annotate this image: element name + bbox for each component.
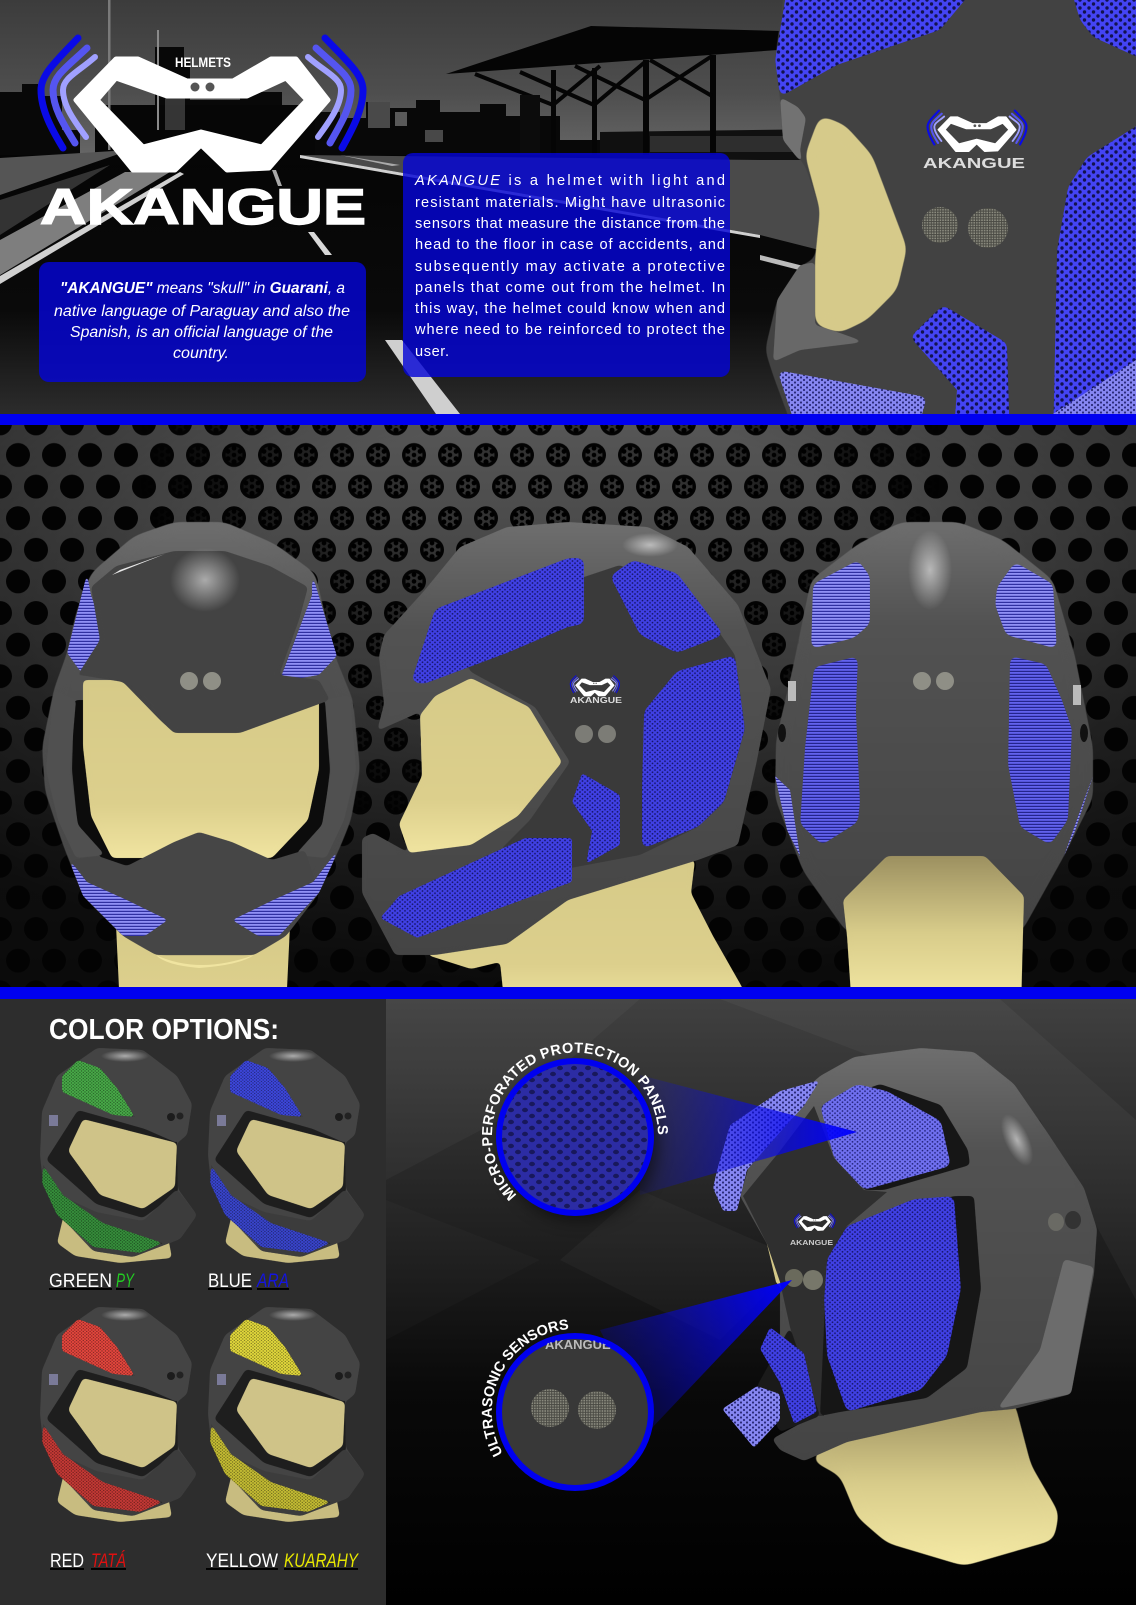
divider bar one	[0, 414, 1136, 425]
top banner with city road photo	[0, 0, 1136, 414]
circular label: MICRO-PERFORATED PROTECTION PANELS	[482, 1042, 668, 1202]
mesh panel: lower	[910, 305, 1010, 440]
label: red	[50, 1549, 126, 1572]
label: red: RED	[50, 1550, 84, 1572]
sensor: second	[803, 1270, 823, 1290]
face slit	[767, 1244, 782, 1290]
mesh: upper right	[279, 573, 337, 682]
mesh: top rear	[610, 560, 724, 653]
mesh: chin inner	[760, 1327, 817, 1424]
front view helmet	[42, 522, 360, 1010]
road	[0, 155, 1136, 414]
meaning callout: native language of Paraguay and also the	[54, 303, 350, 320]
description callout: AKANGUE is a helmet with light and	[414, 173, 725, 189]
mesh: lower left	[63, 845, 168, 936]
mesh: middle left	[800, 656, 860, 845]
helmet: yellow	[208, 1307, 365, 1522]
sensor: right	[203, 672, 221, 690]
helmet logo	[923, 111, 1026, 172]
logo mark	[41, 38, 363, 170]
city skyline	[0, 47, 600, 155]
visor highlight	[170, 548, 240, 612]
shell	[740, 1048, 1097, 1461]
helmet logo	[790, 1214, 835, 1247]
lower rear lighter panel	[997, 1259, 1094, 1409]
sensor: right	[968, 208, 1008, 248]
label: yellow: KUARAHY	[284, 1550, 360, 1572]
mesh: brow	[713, 1080, 820, 1211]
sensor: right	[936, 672, 954, 690]
road dashes	[308, 232, 332, 255]
meaning callout: "AKANGUE" means "skull" in Guarani, a	[60, 280, 345, 297]
mesh: chin band	[380, 838, 572, 938]
helmet logo: AKANGUE	[790, 1238, 833, 1247]
description callout: sensors that measure the distance from the	[415, 216, 725, 232]
shell	[362, 522, 771, 955]
shell	[42, 522, 360, 955]
description callout: user.	[415, 344, 449, 360]
helmet logo: AKANGUE	[570, 696, 623, 705]
highlight	[622, 533, 678, 557]
cavity	[72, 700, 330, 868]
mesh panel: chin	[777, 370, 927, 440]
rear sensors	[1048, 1211, 1081, 1231]
side view helmet	[362, 522, 771, 1010]
ear holes	[778, 724, 786, 742]
back view helmet	[775, 522, 1093, 1010]
visor	[68, 551, 330, 733]
label: green: GREEN	[49, 1270, 112, 1292]
label: blue	[208, 1270, 289, 1292]
pavement, left	[0, 150, 130, 195]
description callout: panels that come out from the helmet. In	[415, 280, 725, 296]
label: yellow	[206, 1550, 360, 1572]
label: red: TATÁ	[91, 1549, 126, 1572]
rim right	[295, 695, 356, 858]
meaning callout: Spanish, is an official language of the	[70, 324, 333, 341]
mesh: top right	[995, 562, 1057, 649]
meaning callout: country.	[173, 345, 229, 362]
mesh: upper left	[67, 573, 123, 682]
face	[399, 678, 562, 853]
callout beam: sensors	[600, 1280, 792, 1430]
helmet: blue	[208, 1048, 365, 1263]
sensor: left	[180, 672, 198, 690]
helmet logo	[570, 676, 623, 705]
face	[805, 115, 907, 333]
callout beam: panels	[640, 1075, 857, 1195]
pavement, right	[300, 155, 1136, 330]
rim left	[46, 690, 105, 858]
chin	[70, 832, 319, 955]
sensor: left	[922, 207, 958, 243]
logo tag: HELMETS	[175, 55, 231, 70]
neck	[427, 860, 750, 1010]
sensor: right	[598, 725, 616, 743]
mesh panel: top	[775, 0, 990, 97]
chin rim	[773, 262, 865, 362]
side logo marks	[788, 681, 796, 701]
description callout: this way, the helmet could know when and	[415, 301, 725, 317]
mesh: chin outer	[722, 1386, 780, 1448]
neck	[809, 1400, 1059, 1566]
face plate	[743, 1106, 887, 1416]
label: blue: BLUE	[208, 1270, 252, 1292]
sky	[0, 0, 1136, 155]
mesh: middle	[572, 773, 620, 864]
mesh panel: right	[1053, 105, 1136, 440]
mesh: middle right	[1008, 656, 1072, 845]
mesh: top left	[811, 560, 870, 649]
description callout: resistant materials. Might have ultrasonic	[415, 195, 725, 211]
panel: color options	[0, 999, 386, 1605]
label: yellow: YELLOW	[206, 1550, 279, 1572]
face	[83, 680, 319, 858]
mesh: lower right	[232, 845, 341, 936]
circular label: ULTRASONIC SENSORS	[482, 1320, 568, 1458]
description callout: where need to be reinforced to protect the	[414, 322, 725, 338]
mesh: big panel	[824, 1196, 961, 1412]
callout circle: ultrasonic sensors	[482, 1320, 654, 1491]
recess: chin	[757, 1327, 820, 1432]
highlight	[908, 530, 952, 610]
label: blue: ARA	[256, 1270, 289, 1292]
label: green: PY	[116, 1270, 135, 1292]
mesh panel: top right	[1065, 0, 1136, 72]
helmet logo: AKANGUE	[923, 155, 1025, 172]
sensor: left	[575, 725, 593, 743]
meaning callout	[39, 262, 366, 382]
shell	[775, 522, 1093, 933]
description callout: head to the floor in case of accidents, and	[415, 237, 725, 253]
heading: COLOR OPTIONS:	[49, 1014, 279, 1046]
recess: big panel	[820, 1196, 981, 1416]
helmet: red	[40, 1307, 197, 1522]
recess: top panel	[820, 1084, 970, 1190]
helmet: green	[40, 1048, 197, 1263]
neck	[116, 925, 290, 1010]
upper rim	[780, 97, 806, 165]
description callout	[403, 153, 730, 377]
callout circle: ultrasonic sensors: AKANGUE	[545, 1337, 611, 1352]
mesh: side strips	[775, 776, 800, 856]
mesh: front top	[411, 558, 584, 684]
brand name: AKANGUE	[40, 179, 366, 235]
mesh: top panel	[820, 1084, 951, 1190]
chin underside	[156, 955, 254, 968]
sensor: highlighted	[785, 1269, 803, 1287]
panel: perforated metal background	[0, 425, 1136, 987]
description callout: subsequently may activate a protective	[415, 259, 725, 275]
highlight	[994, 1110, 1040, 1170]
mesh: rear	[642, 655, 745, 849]
callout circle: micro-perforated panels	[482, 1042, 668, 1221]
neck	[843, 856, 1024, 1010]
big helmet	[713, 1048, 1097, 1566]
sensor: left	[913, 672, 931, 690]
panel: feature detail background	[386, 999, 1136, 1605]
dark centre	[450, 565, 745, 870]
divider bar two	[0, 987, 1136, 999]
pavilion silhouette	[446, 26, 780, 155]
helmet close-up, top right	[765, 0, 1136, 440]
